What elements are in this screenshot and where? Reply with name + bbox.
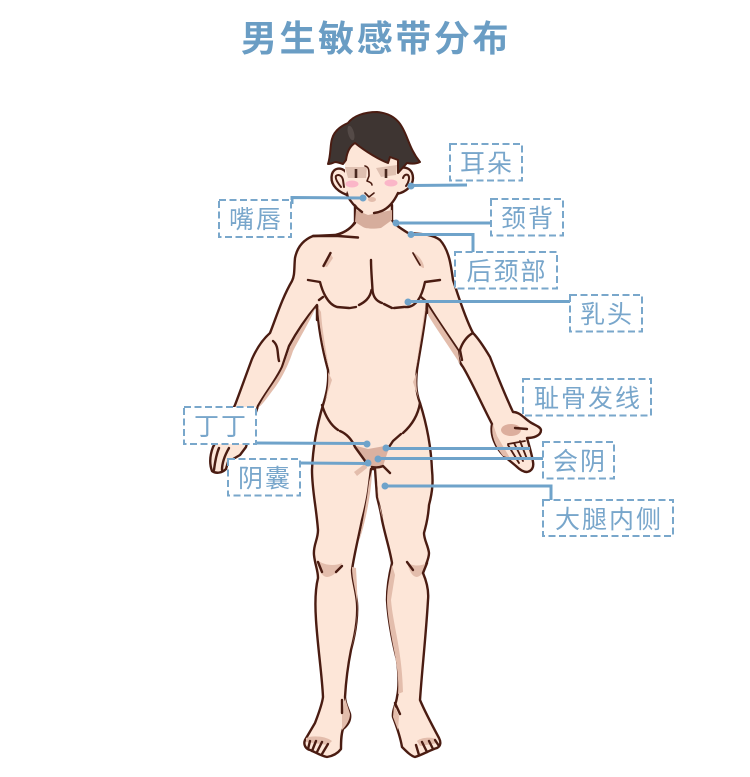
label: 大腿内侧 — [543, 500, 673, 536]
leader line: 乳头 — [404, 298, 570, 306]
leader line: 颈背 — [392, 220, 491, 226]
shading: arms, torso and legs — [258, 306, 510, 746]
label: 耳朵: 耳朵 — [460, 150, 514, 178]
leader line: 嘴唇 — [292, 194, 366, 204]
leader line: 后颈部 — [408, 231, 473, 252]
label: 颈背: 颈背 — [501, 205, 555, 233]
hip and crotch lines — [322, 403, 420, 473]
label: 阴囊 — [228, 459, 300, 496]
eye shadows — [345, 167, 367, 178]
nose — [365, 166, 372, 185]
leader line: 耻骨发线 — [382, 444, 530, 452]
label: 嘴唇 — [219, 200, 291, 237]
eyes — [356, 169, 386, 178]
leader line: 耳朵 — [408, 182, 467, 190]
body fill and outline — [210, 205, 541, 757]
hair — [328, 112, 420, 173]
arm details — [214, 333, 527, 470]
label: 耻骨发线 — [523, 379, 651, 416]
label: 耻骨发线: 耻骨发线 — [534, 385, 642, 413]
label: 后颈部: 后颈部 — [466, 258, 548, 286]
label: 丁丁 — [184, 407, 256, 444]
label: 乳头: 乳头 — [580, 301, 634, 329]
leader line: 会阴 — [374, 456, 543, 462]
leader line: 大腿内侧 — [382, 482, 551, 500]
leader line: 阴囊 — [300, 460, 372, 466]
label: 乳头 — [570, 295, 642, 332]
figure: male body illustration — [210, 112, 541, 757]
collarbone and chest lines — [308, 223, 440, 320]
label: 丁丁: 丁丁 — [194, 413, 248, 441]
leader line: 丁丁 — [256, 440, 370, 448]
title: 男生敏感带分布 — [241, 18, 511, 59]
label: 嘴唇: 嘴唇 — [229, 206, 283, 234]
shading: palm — [501, 424, 521, 436]
label: 会阴 — [543, 442, 614, 478]
face — [345, 135, 400, 213]
hair highlight — [346, 125, 356, 141]
shading: knees — [317, 560, 342, 577]
label: 后颈部 — [455, 252, 557, 288]
label: 会阴: 会阴 — [553, 448, 607, 476]
label: 阴囊: 阴囊 — [238, 465, 292, 493]
blush — [346, 180, 358, 188]
label: 耳朵 — [450, 144, 522, 180]
left ear — [332, 169, 352, 195]
knee and toe lines — [308, 562, 439, 755]
label: 大腿内侧: 大腿内侧 — [555, 506, 663, 534]
mouth — [365, 193, 374, 197]
neck shadow — [355, 210, 392, 229]
right ear — [392, 168, 413, 194]
shading: crotch — [353, 445, 390, 468]
label: 颈背 — [491, 199, 563, 236]
